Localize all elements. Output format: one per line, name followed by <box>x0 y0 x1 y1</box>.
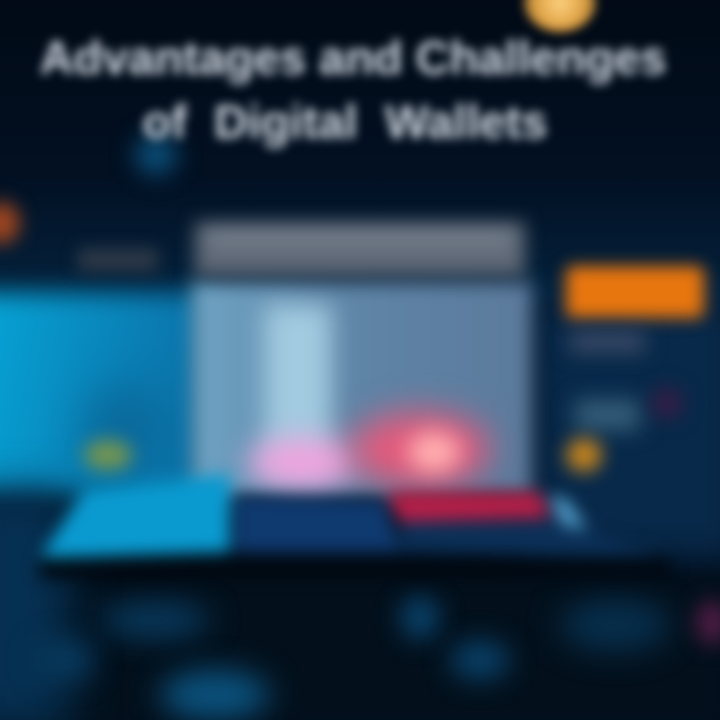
right text lines <box>564 323 652 440</box>
platform blue left <box>40 474 230 558</box>
panel: lower dark area <box>0 575 720 720</box>
left title glow <box>135 135 177 175</box>
panel: left cyan field <box>0 292 205 497</box>
right red accent <box>652 388 682 418</box>
platform highlight <box>548 494 588 530</box>
icon: top sun glow <box>524 0 596 32</box>
pink glow <box>248 438 358 488</box>
red glow <box>350 412 490 487</box>
panel: central translucent screen <box>192 282 532 497</box>
panel: right dark field <box>530 300 720 560</box>
header text stripe <box>207 230 512 244</box>
platform dark mid <box>235 496 400 552</box>
bright glow centre <box>408 432 460 472</box>
platform red band <box>388 492 550 522</box>
lower bokeh lights <box>42 586 720 720</box>
background gradient <box>0 0 720 320</box>
panel: lower left blue haze <box>0 490 70 720</box>
panel: left small label <box>78 248 158 272</box>
icon: right orange dot <box>566 438 602 472</box>
icon: left edge orange dot <box>0 202 20 244</box>
title <box>35 31 672 156</box>
left field mottling <box>80 382 170 482</box>
platform edge <box>40 558 670 578</box>
central light column <box>264 304 332 474</box>
icon: left yellow-green dot <box>84 440 132 470</box>
panel: screen header bar <box>195 222 525 276</box>
title: of Digital Wallets <box>143 95 547 148</box>
orange callout <box>566 266 704 318</box>
title: Advantages and Challenges <box>40 31 666 84</box>
platform right <box>400 520 665 556</box>
